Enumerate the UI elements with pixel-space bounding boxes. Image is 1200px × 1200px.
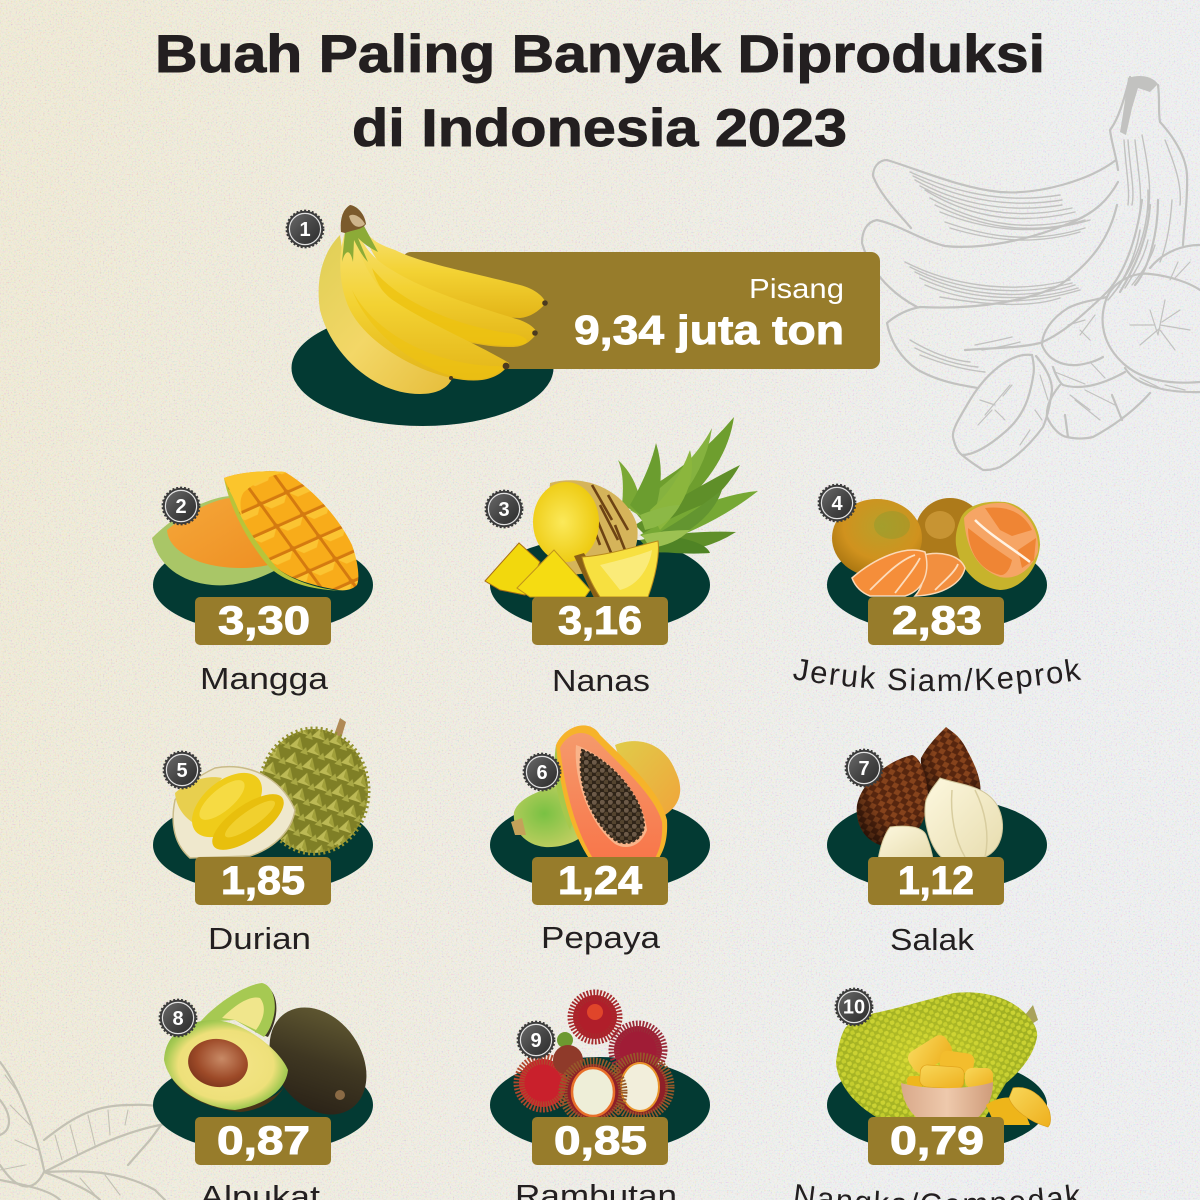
rank 3 item: Nanas <box>485 417 758 698</box>
ellipse base <box>153 1057 373 1153</box>
ellipse base <box>827 1057 1047 1153</box>
icon: jackfruit <box>836 992 1051 1127</box>
rank badge 1: 1 <box>299 219 311 241</box>
dark ellipse base <box>292 310 554 426</box>
value tag <box>532 1117 668 1165</box>
value tag <box>868 1117 1004 1165</box>
rank badge 8: 8 <box>172 1008 184 1030</box>
rank 2 item: Mangga <box>152 471 373 696</box>
ellipse base <box>827 537 1047 633</box>
value tag: 1,24 <box>558 859 643 903</box>
rank badge 1 <box>287 211 323 247</box>
value tag <box>868 857 1004 905</box>
icon: papaya <box>511 725 680 860</box>
label: Pepaya <box>541 920 661 955</box>
rank badge 9: 9 <box>530 1030 542 1052</box>
rank badge 3: 3 <box>498 499 510 521</box>
icon: rambutan <box>519 995 670 1122</box>
value banner: Pisang <box>749 273 844 304</box>
value tag <box>868 597 1004 645</box>
value tag <box>532 597 668 645</box>
rank badge 6: 6 <box>536 762 548 784</box>
icon: salak <box>857 727 1003 860</box>
rank badge 8 <box>160 1000 196 1036</box>
ellipse base <box>153 537 373 633</box>
value tag <box>195 597 331 645</box>
value tag <box>195 1117 331 1165</box>
icon: mango <box>152 471 358 591</box>
rank 4 item: Jeruk Siam/Keprok <box>793 484 1082 694</box>
label: Salak <box>890 922 975 957</box>
value tag: 0,87 <box>217 1119 310 1163</box>
rank badge 5: 5 <box>176 760 188 782</box>
rank 8 item: Alpukat <box>153 983 386 1200</box>
title: Buah Paling Banyak Diproduksi <box>155 25 1045 84</box>
value tag: 3,30 <box>218 599 310 643</box>
rank badge 10 <box>836 989 872 1025</box>
rank 5 item: Durian <box>153 718 373 956</box>
rank badge 9 <box>518 1022 554 1058</box>
ellipse base <box>827 797 1047 893</box>
curved label: Jeruk Siam/Keprok <box>793 658 1082 694</box>
rank 7 item: Salak <box>827 727 1047 957</box>
value tag: 0,85 <box>554 1119 647 1163</box>
value banner: 9,34 juta ton <box>574 307 844 353</box>
ellipse base <box>490 537 710 633</box>
ellipse base <box>490 797 710 893</box>
rank badge 7: 7 <box>858 758 870 780</box>
value banner <box>402 252 880 369</box>
ellipse base <box>153 797 373 893</box>
value tag: 0,79 <box>890 1119 984 1163</box>
rank badge 10: 10 <box>843 996 865 1018</box>
value tag <box>195 857 331 905</box>
rank badge 2: 2 <box>175 496 187 518</box>
value tag: 1,12 <box>898 859 974 903</box>
label: Durian <box>208 921 311 956</box>
title <box>155 25 1045 158</box>
line art: leaves bottom-left <box>0 1062 179 1200</box>
rank badge 7 <box>846 750 882 786</box>
rank badge 5 <box>164 752 200 788</box>
rank 1 item: Pisang <box>287 205 880 426</box>
icon: durian <box>173 718 368 860</box>
label: Mangga <box>200 661 329 696</box>
icon: bananas <box>319 205 548 394</box>
rank badge 6 <box>524 754 560 790</box>
icon: avocado <box>164 983 386 1133</box>
rank badge 4: 4 <box>831 493 843 515</box>
rank 10 item: Nangka/Cempedak <box>795 988 1080 1200</box>
icon: pineapple <box>485 417 758 600</box>
rank 6 item: Pepaya <box>490 725 710 955</box>
value tag <box>532 857 668 905</box>
label: Nanas <box>552 663 650 698</box>
icon: oranges <box>832 498 1040 596</box>
value tag: 2,83 <box>892 599 982 643</box>
title: di Indonesia 2023 <box>352 99 847 158</box>
rank badge 4 <box>819 485 855 521</box>
rank badge 2 <box>163 488 199 524</box>
rank badge 3 <box>486 491 522 527</box>
ellipse base <box>490 1057 710 1153</box>
value tag: 1,85 <box>221 859 305 903</box>
rank 9 item: Rambutan <box>490 995 710 1200</box>
line art: banana bunch backdrop <box>862 76 1200 470</box>
value tag: 3,16 <box>558 599 642 643</box>
